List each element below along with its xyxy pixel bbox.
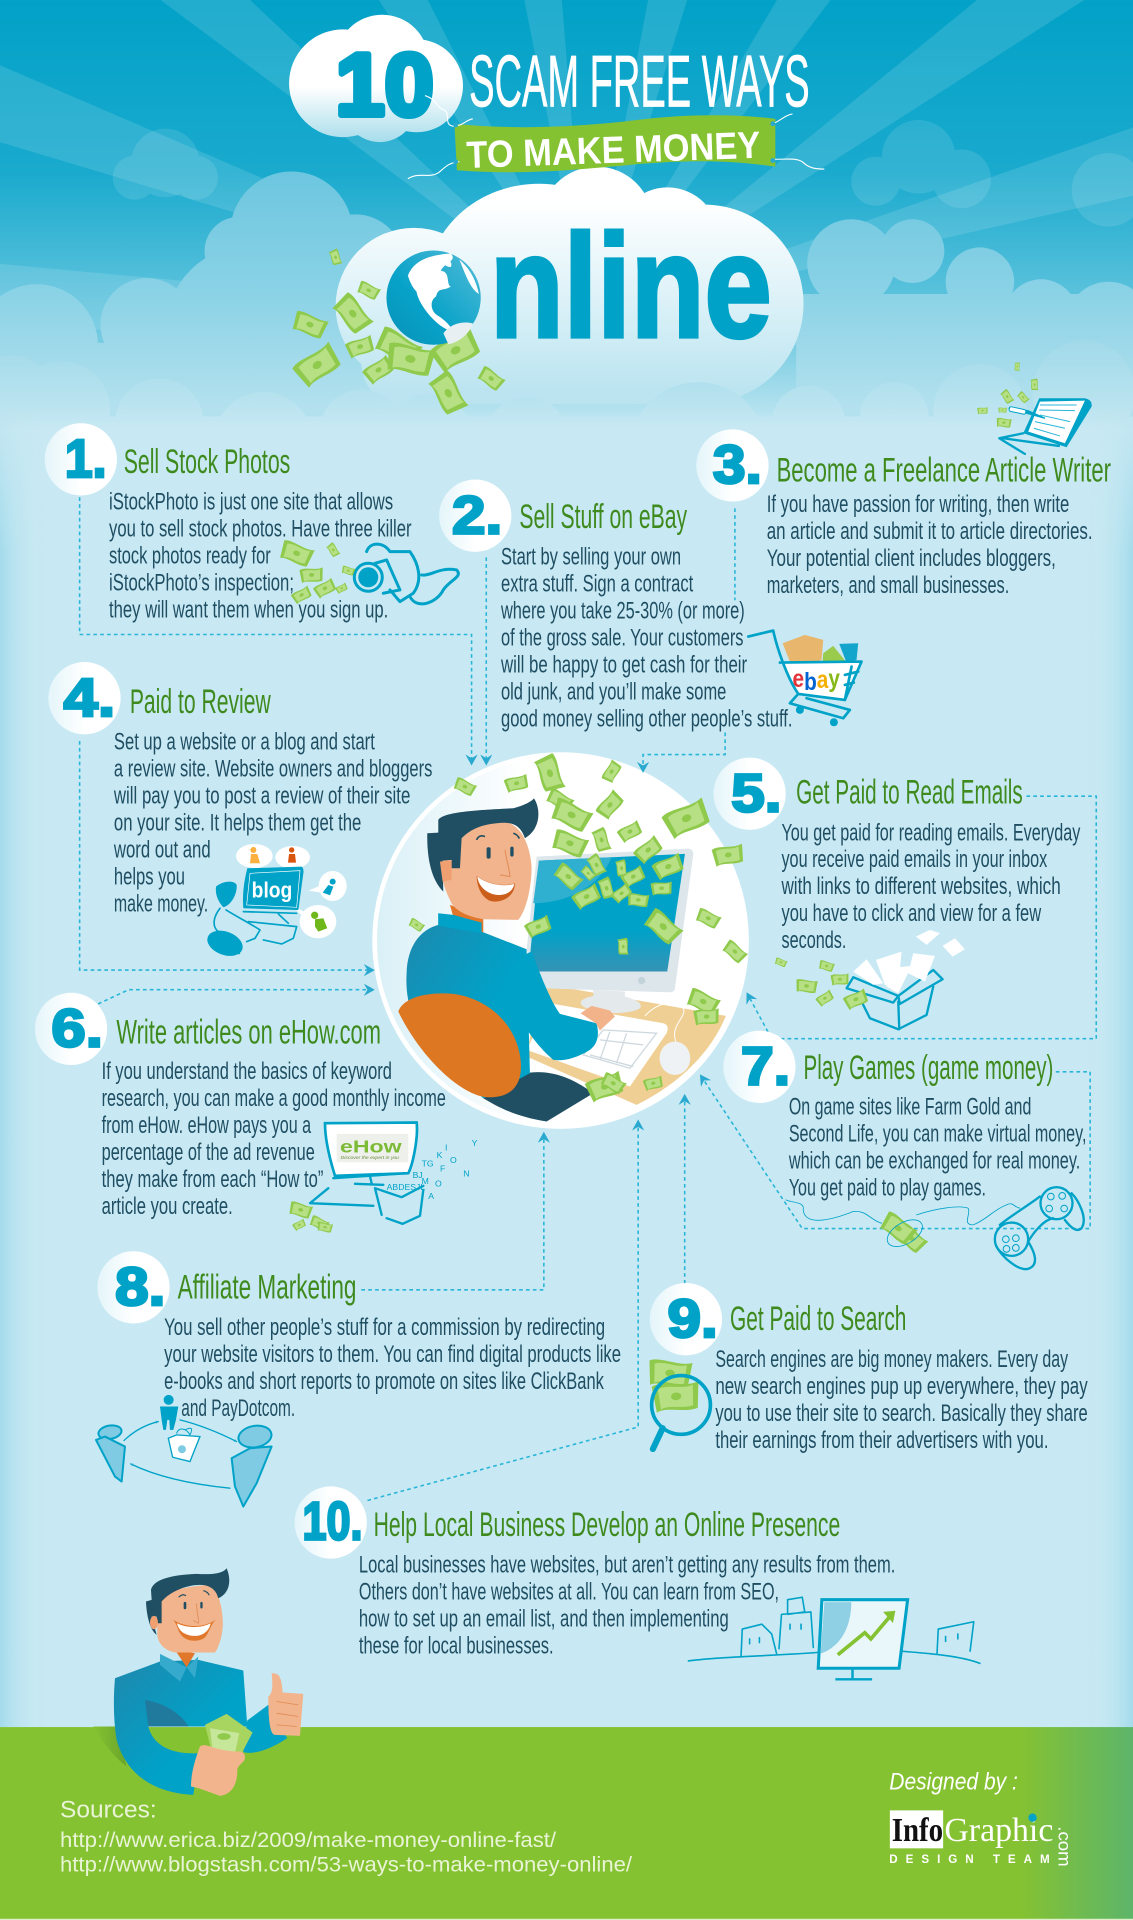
icon: ebay shopping cart: b <box>804 669 817 696</box>
badge 1 <box>45 423 117 495</box>
hand <box>581 1006 615 1031</box>
background sun rays <box>0 0 1133 459</box>
body 2: extra stuff. Sign a contract <box>501 571 693 598</box>
sources label: Sources: <box>60 1797 157 1824</box>
badge 5 <box>713 758 786 830</box>
green ground band <box>0 1727 1133 1919</box>
shirt <box>114 1660 247 1795</box>
panel: step 10 help local business <box>295 1486 980 1679</box>
mouse and cord <box>645 1003 690 1075</box>
icon: affiliate people diagram <box>96 1395 273 1507</box>
panel: step 5 get paid to read emails <box>713 758 1081 1029</box>
panel: step 3 freelance article writer <box>696 362 1111 599</box>
ribbon strings <box>408 96 824 179</box>
trousers <box>483 1072 593 1122</box>
badge 8: 8. <box>115 1257 165 1317</box>
number 10: 10 <box>336 35 434 134</box>
icon: ehow computer with letters: N <box>463 1169 470 1179</box>
body 8: your website visitors to them. You can find digital products like <box>164 1341 621 1368</box>
icon: ehow computer with letters: M <box>422 1176 429 1186</box>
ribbon text: TO MAKE MONEY <box>466 125 761 177</box>
faint far clouds <box>113 120 1133 227</box>
collar <box>160 1650 198 1682</box>
panel: step 1 sell stock photos <box>45 423 458 623</box>
badge 5: 5. <box>731 763 781 823</box>
designed by credit and logo: Graphic <box>944 1811 1053 1849</box>
heading 1: Sell Stock Photos <box>124 443 290 481</box>
heading 6: Write articles on eHow.com <box>116 1014 381 1052</box>
body 4: on your site. It helps them get the <box>114 809 361 836</box>
fist <box>191 1745 245 1796</box>
keyboard <box>527 1003 668 1087</box>
head <box>146 1568 229 1653</box>
body 6: research, you can make a good monthly income <box>102 1085 446 1112</box>
green ribbon banner <box>408 96 824 179</box>
body 3: marketers, and small businesses. <box>767 572 1009 599</box>
body 5: seconds. <box>781 927 846 954</box>
badge 3 <box>696 429 769 502</box>
icon: ehow computer with letters: eHow <box>340 1137 403 1157</box>
body 7: You get paid to play games. <box>789 1174 986 1201</box>
title: scam free ways: SCAM FREE WAYS <box>469 40 810 123</box>
body 5 <box>781 819 1081 954</box>
body 1: stock photos ready for <box>109 542 271 569</box>
body 8: e-books and short reports to promote on sites like ClickBank <box>164 1368 604 1395</box>
dashed connector arrows <box>80 497 1096 1500</box>
money bills <box>408 753 748 1103</box>
body 6: percentage of the ad revenue <box>102 1139 315 1166</box>
body 8 <box>164 1314 621 1422</box>
middle cloud layer <box>0 171 1133 429</box>
body 2: old junk, and you’ll make some <box>501 678 726 705</box>
front cloud layer <box>0 341 1133 519</box>
badge 6: 6. <box>51 999 103 1059</box>
heading 2: Sell Stuff on eBay <box>519 498 688 536</box>
badge 1: 1. <box>65 429 107 489</box>
badge 4: 4. <box>64 668 115 728</box>
body 6: they make from each “How to” <box>102 1166 323 1193</box>
icon: blog computer: blog <box>252 877 292 902</box>
body 6 <box>102 1058 446 1220</box>
icon: ebay shopping cart: e <box>793 666 804 693</box>
body 2 <box>500 544 792 732</box>
icon: globe <box>386 250 481 345</box>
icon: ehow computer with letters: BJ <box>413 1170 423 1180</box>
bottom man giving thumbs up <box>93 1568 303 1796</box>
badge 7: 7. <box>741 1037 790 1097</box>
body 6: article you create. <box>102 1193 233 1220</box>
icon: camera with money <box>278 539 458 605</box>
logo box <box>890 1810 943 1848</box>
badge 7 <box>723 1031 796 1103</box>
bottom edge line <box>0 1919 1133 1920</box>
body 10: Local businesses have websites, but aren’t getting any results from them. <box>359 1552 895 1579</box>
source url 1: http://www.erica.biz/2009/make-money-online-fast/ <box>60 1829 556 1852</box>
collar <box>438 913 482 933</box>
icon: box of emails <box>774 930 965 1029</box>
body 7 <box>788 1094 1086 1201</box>
badge 9: 9. <box>668 1289 718 1349</box>
icon: ehow computer with letters: TG <box>422 1159 434 1169</box>
panel: step 2 sell stuff on ebay <box>439 480 862 732</box>
badge 6 <box>35 993 107 1065</box>
designed by text: Designed by : <box>889 1769 1018 1796</box>
body 4: Set up a website or a blog and start <box>114 729 375 756</box>
panel: step 8 affiliate marketing <box>96 1251 621 1507</box>
torso <box>406 913 530 1098</box>
icon: ebay shopping cart <box>748 631 862 726</box>
sources block <box>60 1797 632 1877</box>
badge 9 <box>650 1283 722 1355</box>
body 1 <box>109 489 412 623</box>
badge 2: 2. <box>452 485 502 545</box>
body 1: iStockPhoto’s inspection; <box>109 569 294 596</box>
body 4: a review site. Website owners and bloggers <box>114 756 432 783</box>
neck <box>450 905 483 933</box>
body 2: Start by selling your own <box>501 544 681 571</box>
panel: step 6 write articles on ehow <box>35 993 478 1233</box>
heading 4: Paid to Review <box>130 683 271 721</box>
body 10: how to set up an email list, and then implementing <box>359 1606 729 1633</box>
badge 10 <box>295 1486 367 1559</box>
icon: ehow computer with letters: ABDESJL <box>387 1182 425 1192</box>
badge 4 <box>48 662 121 734</box>
icon: ehow computer with letters: Y <box>472 1138 478 1148</box>
body 6: from eHow. eHow pays you a <box>102 1112 311 1139</box>
icon: ehow computer with letters: A <box>428 1191 434 1201</box>
panel: step 4 paid to review <box>48 662 432 961</box>
banknotes in hand <box>205 1714 253 1757</box>
icon: laptop with pen <box>977 362 1092 454</box>
body 8: You sell other people’s stuff for a commission by redirecting <box>164 1314 605 1341</box>
online cloud <box>336 167 804 410</box>
badge 10: 10. <box>303 1492 363 1552</box>
icon: ehow computer with letters: O <box>435 1179 442 1189</box>
white disc <box>375 755 747 1127</box>
body 1: they will want them when you sign up. <box>109 596 388 623</box>
logo wordmark: Info <box>892 1811 943 1849</box>
icon: ehow computer with letters: O <box>450 1155 457 1165</box>
icon: magnifier with money <box>647 1359 710 1449</box>
heading 10: Help Local Business Develop an Online Presence <box>374 1506 840 1544</box>
body 4: word out and <box>113 836 211 863</box>
body 8: and PayDotcom. <box>181 1395 295 1422</box>
icon: game controller with money <box>786 1187 1084 1269</box>
body 3 <box>767 491 1093 599</box>
icon: ehow computer with letters: K <box>437 1150 443 1160</box>
shadow on ground <box>93 1727 127 1767</box>
body 2: where you take 25-30% (or more) <box>500 598 745 625</box>
heading 8: Affiliate Marketing <box>178 1268 356 1306</box>
central illustration: man at computer <box>375 753 748 1127</box>
word nline: nline <box>490 205 772 369</box>
thumbs up hand <box>268 1673 303 1736</box>
body 1: you to sell stock photos. Have three killer <box>109 516 412 543</box>
body 1: iStockPhoto is just one site that allows <box>109 489 393 516</box>
icon: blog computer <box>204 844 347 961</box>
icon: ehow computer with letters: I <box>445 1143 447 1153</box>
icon: ehow computer with letters: Discover the expert in you <box>341 1155 400 1160</box>
body 2: will be happy to get cash for their <box>500 651 747 678</box>
badge 2 <box>439 480 511 552</box>
body 6: If you understand the basics of keyword <box>102 1058 392 1085</box>
body 9 <box>715 1346 1088 1454</box>
body 4: make money. <box>114 890 208 917</box>
body 10 <box>359 1552 895 1660</box>
desk <box>527 983 726 1105</box>
icon: ebay shopping cart: y <box>828 666 840 693</box>
icon: town skyline with chart monitor <box>688 1597 980 1679</box>
logo com: .com <box>1054 1826 1074 1867</box>
body 10: these for local businesses. <box>359 1633 554 1660</box>
icon: ebay shopping cart: a <box>817 667 829 694</box>
body 4: will pay you to post a review of their site <box>113 783 410 810</box>
icon: ehow computer with letters <box>288 1123 478 1233</box>
heading 9: Get Paid to Search <box>730 1300 906 1338</box>
body 4 <box>113 729 432 917</box>
body 10: Others don’t have websites at all. You can learn from SEO, <box>359 1579 779 1606</box>
panel: step 9 get paid to search <box>647 1283 1088 1454</box>
panel: step 7 play games <box>723 1031 1086 1269</box>
badge 8 <box>97 1251 170 1323</box>
flying money around globe <box>291 248 506 417</box>
cloud with number 10 <box>289 15 463 142</box>
designed by credit and logo <box>889 1769 1074 1867</box>
body 2: of the gross sale. Your customers <box>501 625 743 652</box>
badge 3: 3. <box>713 435 762 495</box>
body page side shading <box>0 404 1133 1727</box>
source url 2: http://www.blogstash.com/53-ways-to-make-money-online/ <box>60 1854 632 1877</box>
body 2: good money selling other people’s stuff. <box>501 705 792 732</box>
chair <box>398 993 521 1097</box>
head <box>427 798 538 920</box>
arm <box>507 952 598 1060</box>
monitor <box>527 849 693 1013</box>
icon: ehow computer with letters: F <box>440 1164 445 1174</box>
body 4: helps you <box>114 863 185 890</box>
logo tagline: DESIGN TEAM <box>889 1853 1050 1866</box>
